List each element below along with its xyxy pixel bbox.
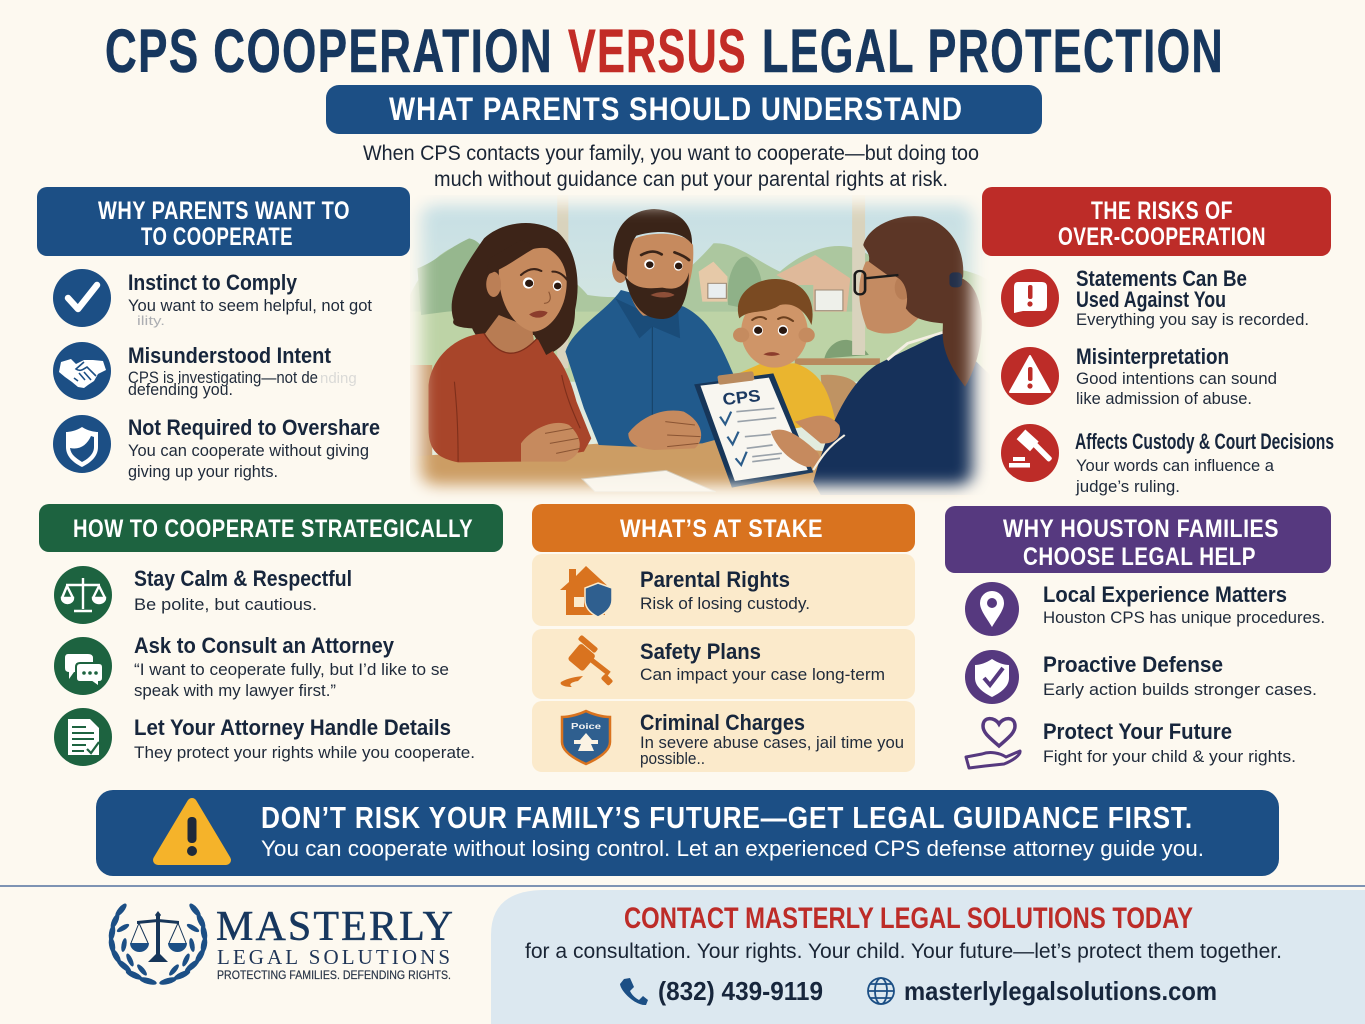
callout banner: You can cooperate without losing control. Let an experienced CPS defense attorney guide you. [261, 836, 1204, 861]
heading [532, 504, 915, 552]
item: affects custody and court decisions: judge’s ruling. [1075, 477, 1180, 496]
item: not required to overshare: You can cooperate without giving [128, 441, 369, 460]
item: local experience matters: Houston CPS has unique procedures. [1043, 608, 1325, 627]
item: statements can be used against you: Used Against You [1076, 287, 1226, 312]
item: misunderstood intent: nding [320, 370, 357, 387]
contact panel: (832) 439-9119 [658, 976, 823, 1006]
item: statements can be used against you: Statements Can Be [1076, 266, 1247, 291]
intro text: much without guidance can put your parental rights at risk. [434, 168, 948, 191]
paper on the table [582, 470, 716, 492]
icon: warning triangle [158, 803, 226, 860]
logo: Masterly Legal Solutions: LEGAL SOLUTIONS [217, 945, 450, 969]
subtitle banner [326, 85, 1042, 134]
CPS worker [813, 216, 990, 495]
item: statements can be used against you: Everything you say is recorded. [1076, 310, 1309, 329]
item: proactive defense: Proactive Defense [1043, 652, 1223, 677]
contact panel [491, 890, 1365, 1024]
item: misinterpretation [1001, 344, 1277, 408]
item: instinct to comply [53, 269, 372, 328]
item: instinct to comply: ility. [137, 313, 165, 328]
card: parental rights [532, 554, 915, 626]
item: stay calm and respectful: Be polite, but cautious. [134, 595, 317, 614]
title: VERSUS [568, 17, 747, 85]
card: parental rights: Parental Rights [640, 567, 790, 592]
item: misunderstood intent: CPS is investigating—not de [128, 368, 318, 387]
item: misinterpretation: like admission of abuse. [1076, 389, 1252, 408]
callout banner: DON’T RISK YOUR FAMILY’S FUTURE—GET LEGAL GUIDANCE FIRST. [261, 800, 1193, 835]
heading: HOW TO COOPERATE STRATEGICALLY [73, 515, 473, 543]
heading: TO COOPERATE [141, 223, 293, 251]
heading [982, 187, 1331, 256]
item: not required to overshare [53, 415, 380, 481]
card: safety plans [532, 629, 915, 699]
item: ask to consult an attorney [54, 633, 449, 700]
card: criminal charges: Poice [571, 722, 602, 731]
card: criminal charges: In severe abuse cases, jail time you [640, 733, 904, 752]
item: let your attorney handle details: They protect your rights while you cooperate. [134, 743, 475, 762]
heading: CHOOSE LEGAL HELP [1023, 543, 1256, 571]
icon: phone [620, 978, 648, 1005]
heading [37, 187, 410, 256]
heading [39, 504, 503, 552]
illustration: family meeting with CPS worker [410, 195, 990, 505]
card: criminal charges: possible.. [640, 749, 705, 768]
item: local experience matters: Local Experience Matters [1043, 582, 1287, 607]
item: protect your future [966, 719, 1296, 768]
heading: WHY PARENTS WANT TO [98, 197, 350, 225]
title: CPS COOPERATION [105, 17, 553, 85]
item: let your attorney handle details [54, 708, 475, 766]
callout banner [96, 790, 1279, 876]
item: misunderstood intent: defending you. [128, 380, 233, 399]
item: protect your future: Protect Your Future [1043, 719, 1232, 744]
clipboard: CPS [721, 386, 762, 409]
item: not required to overshare: giving up your rights. [128, 462, 278, 481]
panel: why parents want to cooperate [37, 187, 410, 481]
table [410, 440, 956, 496]
item: misunderstood intent [53, 342, 357, 400]
card: criminal charges [532, 701, 915, 772]
panel: risks of over-cooperation [982, 187, 1334, 496]
child [733, 279, 860, 435]
logo: Masterly Legal Solutions [108, 902, 453, 986]
item: stay calm and respectful [54, 566, 352, 624]
icon: laurel wreath and scales [108, 902, 208, 986]
heading: WHAT’S AT STAKE [620, 515, 823, 543]
item: protect your future: Fight for your child & your rights. [1043, 747, 1296, 766]
woman [428, 223, 591, 462]
item: misunderstood intent: Misunderstood Intent [128, 343, 332, 368]
intro text: When CPS contacts your family, you want to cooperate—but doing too [363, 142, 979, 165]
item: local experience matters [965, 582, 1325, 636]
heading [945, 506, 1331, 573]
card: parental rights: Risk of losing custody. [640, 594, 810, 613]
item: instinct to comply: Instinct to Comply [128, 270, 298, 295]
panel: how to cooperate strategically [39, 504, 503, 766]
clipboard [694, 371, 845, 488]
subtitle banner: WHAT PARENTS SHOULD UNDERSTAND [389, 91, 963, 127]
card: criminal charges: Criminal Charges [640, 710, 805, 735]
item: statements can be used against you [1001, 266, 1309, 329]
item: proactive defense [965, 650, 1317, 704]
item: let your attorney handle details: Let Your Attorney Handle Details [134, 715, 451, 740]
icon: globe [868, 978, 894, 1004]
item: stay calm and respectful: Stay Calm & Respectful [134, 566, 352, 591]
logo: Masterly Legal Solutions: MASTERLY [216, 904, 453, 950]
panel: why Houston families choose legal help [945, 506, 1331, 768]
intro text [363, 142, 979, 191]
contact panel: CONTACT MASTERLY LEGAL SOLUTIONS TODAY [624, 902, 1193, 935]
item: not required to overshare: Not Required to Overshare [128, 415, 380, 440]
item: ask to consult an attorney: speak with my lawyer first.” [134, 681, 336, 700]
item: affects custody and court decisions: Your words can influence a [1076, 456, 1275, 475]
item: ask to consult an attorney: “I want to ceoperate fully, but I’d like to se [134, 660, 449, 679]
item: misinterpretation: Misinterpretation [1076, 344, 1229, 369]
heading: WHY HOUSTON FAMILIES [1003, 515, 1279, 543]
heading: THE RISKS OF [1091, 197, 1233, 225]
heading: OVER-COOPERATION [1058, 223, 1266, 251]
item: affects custody and court decisions [1001, 424, 1334, 496]
man [565, 209, 734, 450]
item: proactive defense: Early action builds stronger cases. [1043, 680, 1317, 699]
panel: what's at stake [532, 504, 915, 772]
contact panel: masterlylegalsolutions.com [904, 976, 1217, 1006]
item: instinct to comply: You want to seem helpful, not got [128, 296, 372, 315]
item: ask to consult an attorney: Ask to Consult an Attorney [134, 633, 395, 658]
card: safety plans: Safety Plans [640, 639, 761, 664]
logo: Masterly Legal Solutions: PROTECTING FAMILIES. DEFENDING RIGHTS. [217, 968, 451, 982]
contact panel: for a consultation. Your rights. Your child. Your future—let’s protect them together. [525, 940, 1282, 963]
item: misinterpretation: Good intentions can sound [1076, 369, 1277, 388]
card: safety plans: Can impact your case long-term [640, 665, 885, 684]
